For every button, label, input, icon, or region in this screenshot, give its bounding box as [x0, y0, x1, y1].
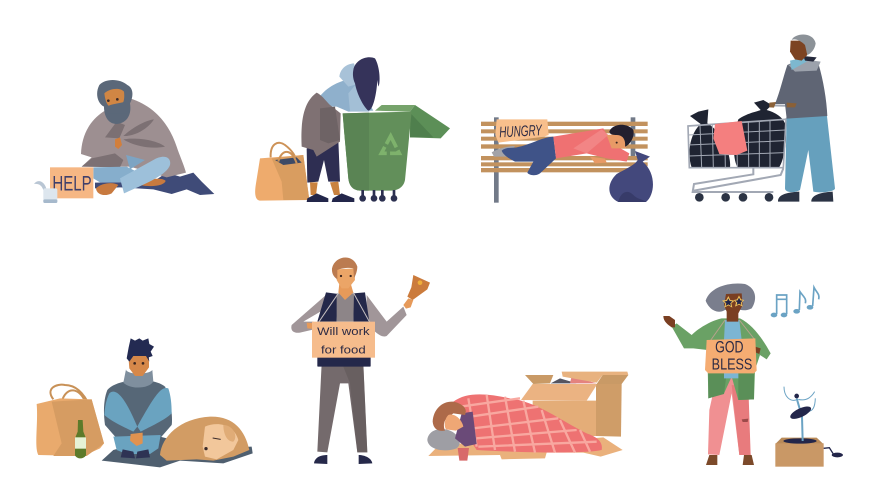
- head with star glasses: [706, 283, 755, 322]
- wine bottle: [75, 420, 86, 458]
- scene: woman sleeping by cardboard box: [427, 372, 628, 461]
- scene: woman with GOD BLESS sign, phonograph and notes: [663, 283, 843, 467]
- sign: will work for food: for food: [321, 344, 366, 356]
- paper bag: [36, 385, 104, 456]
- sign: god bless: GOD: [715, 338, 743, 357]
- hair and beard: [97, 80, 132, 124]
- HELP sign: [50, 167, 93, 198]
- icon: recycling symbol: [381, 136, 399, 153]
- man: [104, 338, 172, 458]
- pillow: [427, 429, 460, 450]
- scene: young man with bag, bottle and dog: [36, 338, 253, 467]
- scene: person pushing shopping cart: [688, 35, 835, 202]
- cardboard on ground: [428, 437, 623, 459]
- garbage bags: [689, 100, 786, 168]
- checked blanket: [453, 394, 602, 453]
- shopping bag: [255, 143, 309, 201]
- scene: man sleeping on bench: [481, 117, 653, 203]
- sleeping woman head: [433, 402, 477, 447]
- towel on cart: [713, 121, 747, 155]
- sign: will work for food: [312, 322, 375, 358]
- cardboard box: [521, 372, 628, 437]
- tin can: [34, 181, 57, 203]
- HELP sign: HELP: [52, 171, 92, 195]
- bin wheels: [359, 190, 397, 202]
- sign: god bless: [705, 320, 757, 373]
- cart wheels: [695, 193, 773, 202]
- begging bowl / bell: [403, 275, 430, 309]
- garbage bag: [609, 151, 653, 202]
- torso and arms: [291, 292, 407, 367]
- scene: man with will work for food sign: [291, 257, 430, 464]
- person: [769, 35, 835, 202]
- cardigan and arms: [663, 316, 771, 400]
- pink trousers: [708, 377, 751, 455]
- sign: will work for food: Will work: [317, 326, 370, 338]
- trousers: [317, 363, 367, 452]
- cup: [458, 448, 469, 461]
- sleeping dog: [160, 417, 249, 461]
- scene: woman searching in recycling bin: [255, 57, 450, 202]
- phonograph with dancer: [775, 387, 843, 467]
- icon: music notes: [771, 287, 819, 317]
- HUNGRY sign: HUNGRY: [499, 122, 543, 141]
- head: [332, 257, 357, 300]
- shopping cart: [688, 105, 798, 192]
- bench: [481, 117, 648, 203]
- scene: bearded man with HELP sign: [34, 80, 214, 203]
- sign: god bless: BLESS: [712, 356, 752, 373]
- recycling bin: [343, 105, 450, 202]
- mat: [102, 437, 253, 467]
- HUNGRY sign: [495, 119, 549, 143]
